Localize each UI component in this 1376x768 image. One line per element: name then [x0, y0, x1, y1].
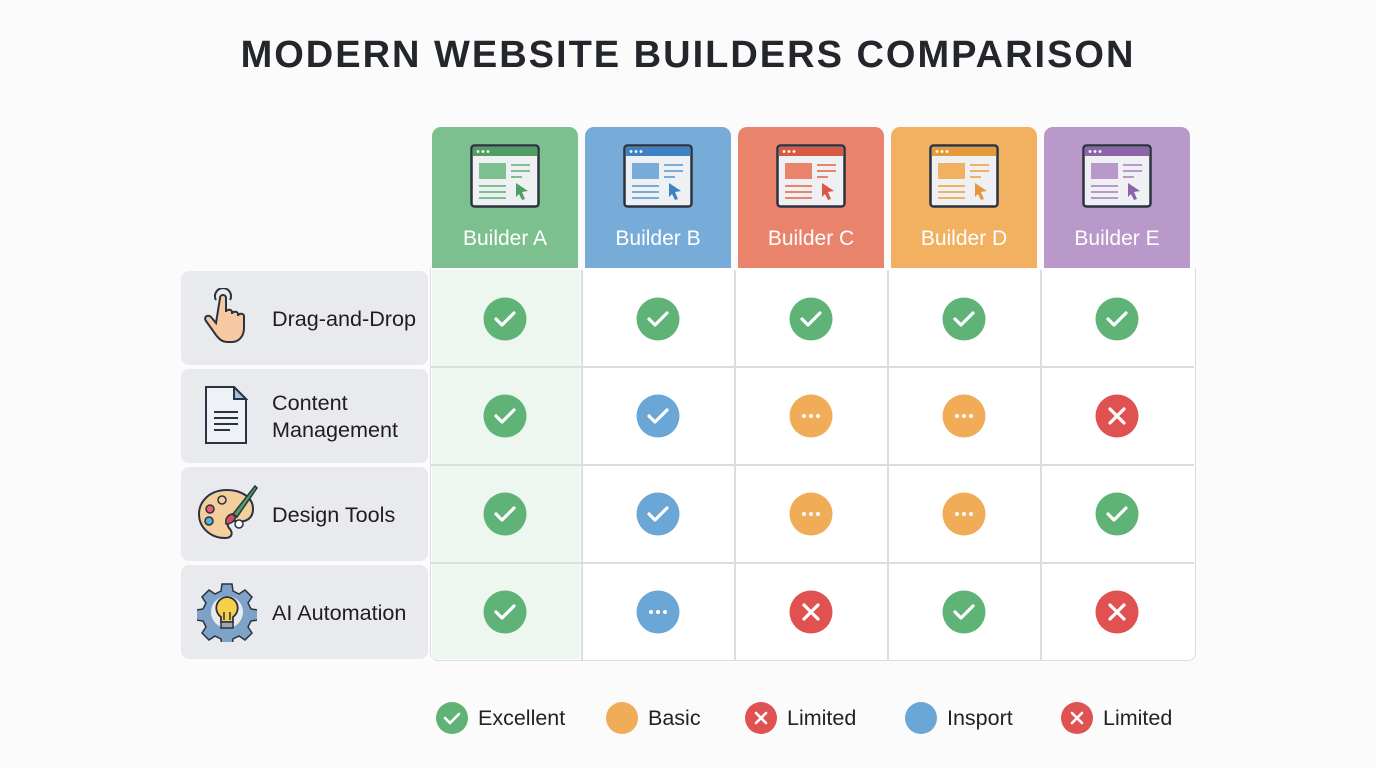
header: Builder B: [585, 127, 731, 268]
header: Builder C: Builder C: [768, 227, 854, 250]
header: Builder D: Builder D: [921, 227, 1007, 250]
header: Builder D: [891, 127, 1037, 268]
row label: AI Automation: AI Automation: [272, 600, 406, 624]
header: Builder E: [1044, 127, 1190, 268]
header: Builder A: [432, 127, 578, 268]
row label: Design Tools: Design Tools: [272, 502, 395, 526]
legend: Insport: [947, 706, 1013, 730]
row label: Content Management: Content: [272, 390, 348, 415]
legend: Limited: [787, 706, 856, 730]
row label: Drag-and-Drop: Drag-and-Drop: [272, 306, 416, 330]
row label: AI Automation: [181, 565, 428, 659]
row label: Content Management: Management: [272, 417, 398, 442]
legend: Basic: [648, 706, 701, 730]
header: Builder B: Builder B: [615, 227, 701, 250]
row label: Drag-and-Drop: [181, 271, 428, 365]
row label: Content Management: [181, 369, 428, 463]
column A tint: [432, 270, 580, 659]
grid background: [430, 268, 1196, 661]
title: MODERN WEBSITE BUILDERS COMPARISON: [241, 34, 1135, 76]
legend: Excellent: [478, 706, 565, 730]
row label: Design Tools: [181, 467, 428, 561]
header: Builder A: Builder A: [463, 227, 547, 250]
legend: Limited: [1103, 706, 1172, 730]
header: Builder C: [738, 127, 884, 268]
header: Builder E: Builder E: [1074, 227, 1160, 250]
